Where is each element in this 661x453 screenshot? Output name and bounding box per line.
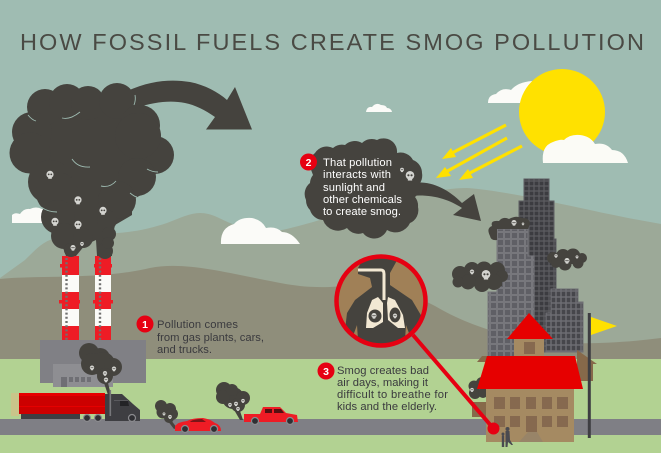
red pickup truck	[244, 407, 298, 424]
smoke highlight arcs	[28, 95, 158, 212]
truck	[11, 390, 140, 422]
trachea	[358, 270, 384, 300]
factory lower block	[53, 364, 113, 387]
smog behind school	[468, 377, 488, 399]
right building	[546, 289, 583, 352]
grey front building	[488, 229, 534, 358]
step 2 text: other chemicals	[323, 194, 402, 206]
right lung damage	[390, 308, 400, 322]
people silhouettes	[502, 427, 513, 447]
cloud behind sun	[488, 81, 540, 103]
front hills	[0, 266, 661, 360]
ray 2	[436, 138, 507, 178]
cloud: behind smoke	[12, 208, 50, 223]
school	[468, 313, 597, 442]
step 2 badge	[300, 154, 317, 170]
left lung damage	[368, 310, 382, 322]
cloud in front of sun	[543, 135, 628, 163]
truck wheels	[84, 414, 136, 422]
upper smog skulls	[511, 220, 524, 226]
step 3 text: kids and the elderly.	[337, 401, 437, 413]
step 2 text: sunlight and	[323, 182, 385, 194]
skulls in smoke	[46, 171, 107, 251]
big smoke cloud	[10, 83, 174, 259]
ray 1	[442, 125, 506, 159]
grass	[0, 359, 661, 453]
right stack	[93, 256, 113, 340]
step 1 badge	[136, 316, 154, 332]
school windows	[494, 397, 568, 427]
red car	[175, 418, 221, 432]
speech smoke bubble	[305, 138, 422, 239]
step 2 badge: 2	[306, 157, 312, 169]
trailer skirt	[21, 414, 80, 419]
road	[0, 419, 661, 435]
step 1 text: Pollution comes	[157, 319, 238, 331]
lungs	[366, 297, 405, 328]
factory main block	[40, 340, 146, 383]
magnifier ring	[336, 256, 426, 346]
big arrow	[125, 81, 252, 130]
second arrow	[410, 182, 481, 221]
step 3 badge: 3	[323, 366, 329, 378]
smog cloud: upper left of tower	[488, 217, 530, 240]
car exhaust smoke	[155, 400, 178, 429]
magnifier handle with dot	[413, 335, 500, 434]
back hills	[0, 188, 661, 360]
school roof	[477, 356, 583, 389]
school walls	[486, 389, 574, 442]
skyscrapers	[488, 179, 583, 358]
flag pole	[588, 313, 591, 438]
sun	[519, 69, 605, 155]
dark tower	[519, 179, 556, 352]
magnifier lens fill	[336, 256, 426, 346]
person silhouette	[346, 258, 421, 344]
school wings	[472, 350, 597, 417]
step 2 text: to create smog.	[323, 206, 401, 218]
left stack	[59, 256, 80, 340]
sun rays	[436, 125, 522, 180]
lung magnifier	[336, 255, 426, 350]
trailer motion blur	[11, 393, 19, 416]
school door	[526, 416, 537, 432]
smog cloud: left of buildings	[452, 262, 508, 292]
school steps	[519, 432, 543, 442]
cupola roof	[507, 313, 553, 339]
step 1 badge: 1	[142, 319, 148, 331]
cloud: right of smoke	[221, 218, 300, 244]
school cupola	[514, 338, 544, 359]
title: HOW FOSSIL FUELS CREATE SMOG POLLUTION	[20, 29, 644, 55]
step 3 badge	[318, 362, 334, 380]
step 1 text: and trucks.	[157, 344, 212, 356]
ray 3	[459, 146, 522, 180]
smog cloud: right of tower	[547, 248, 587, 270]
step 2 text: That pollution	[323, 157, 392, 169]
factory	[40, 340, 146, 387]
cab	[105, 394, 140, 421]
truck exhaust smoke	[79, 343, 122, 395]
yellow pennant	[591, 317, 617, 335]
step 2 text: interacts with	[323, 169, 391, 181]
smoke skulls	[406, 171, 414, 181]
clouds left	[12, 208, 300, 244]
step 3 text: air days, making it	[337, 377, 429, 389]
tan arm gaps	[354, 325, 409, 336]
step 1 text: from gas plants, cars,	[157, 332, 264, 344]
exhaust pipe	[110, 390, 111, 416]
flag	[588, 313, 617, 438]
step 3 text: Smog creates bad	[337, 365, 429, 377]
trailer	[19, 393, 105, 414]
pickup exhaust smoke	[216, 382, 250, 420]
step 3 text: difficult to breathe for	[337, 389, 448, 401]
smokestacks	[59, 256, 113, 340]
small white cloud	[366, 104, 392, 112]
